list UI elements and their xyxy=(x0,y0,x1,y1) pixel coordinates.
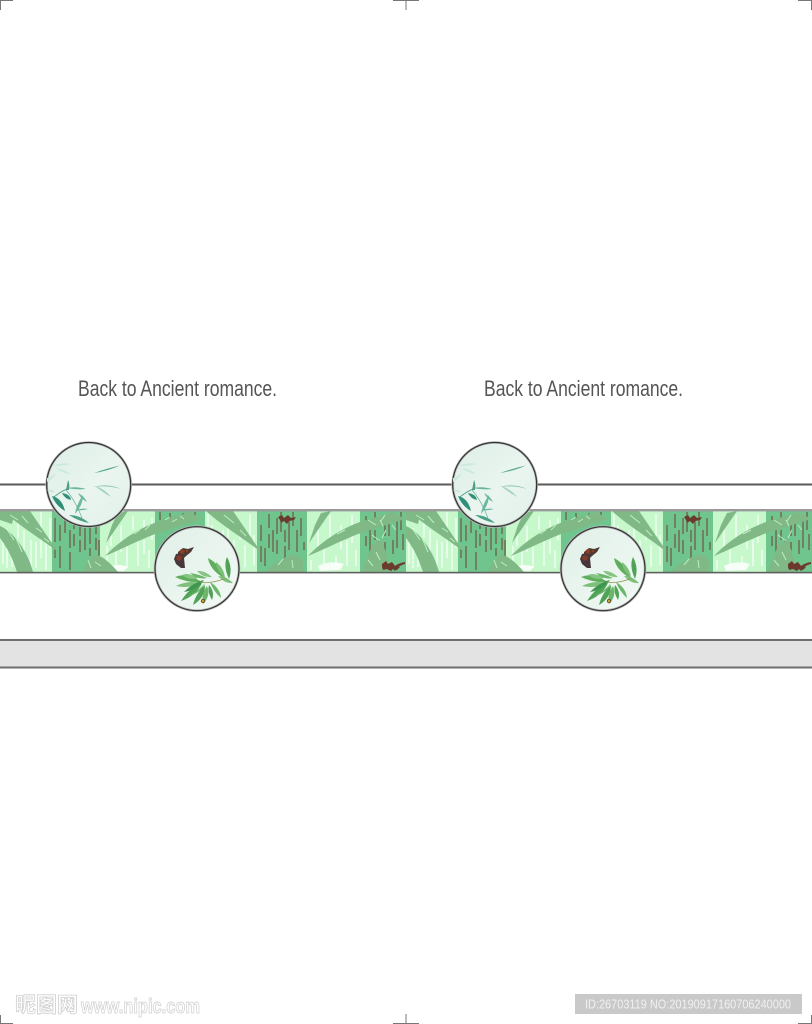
watermark: site logo xyxy=(15,994,200,1018)
panel: grey strip xyxy=(0,639,812,668)
watermark: site logo: 昵图网 xyxy=(15,994,78,1017)
medallions: right pair xyxy=(453,442,645,611)
thin horizontal rule xyxy=(0,484,812,486)
watermark: site logo: www.nipic.com xyxy=(80,996,200,1018)
medallions: left pair xyxy=(47,442,239,611)
heading: right tagline: Back to Ancient romance. xyxy=(484,376,683,401)
panel: bamboo pattern band xyxy=(0,509,812,573)
watermark: id box xyxy=(575,994,802,1014)
heading: left tagline: Back to Ancient romance. xyxy=(78,376,277,401)
